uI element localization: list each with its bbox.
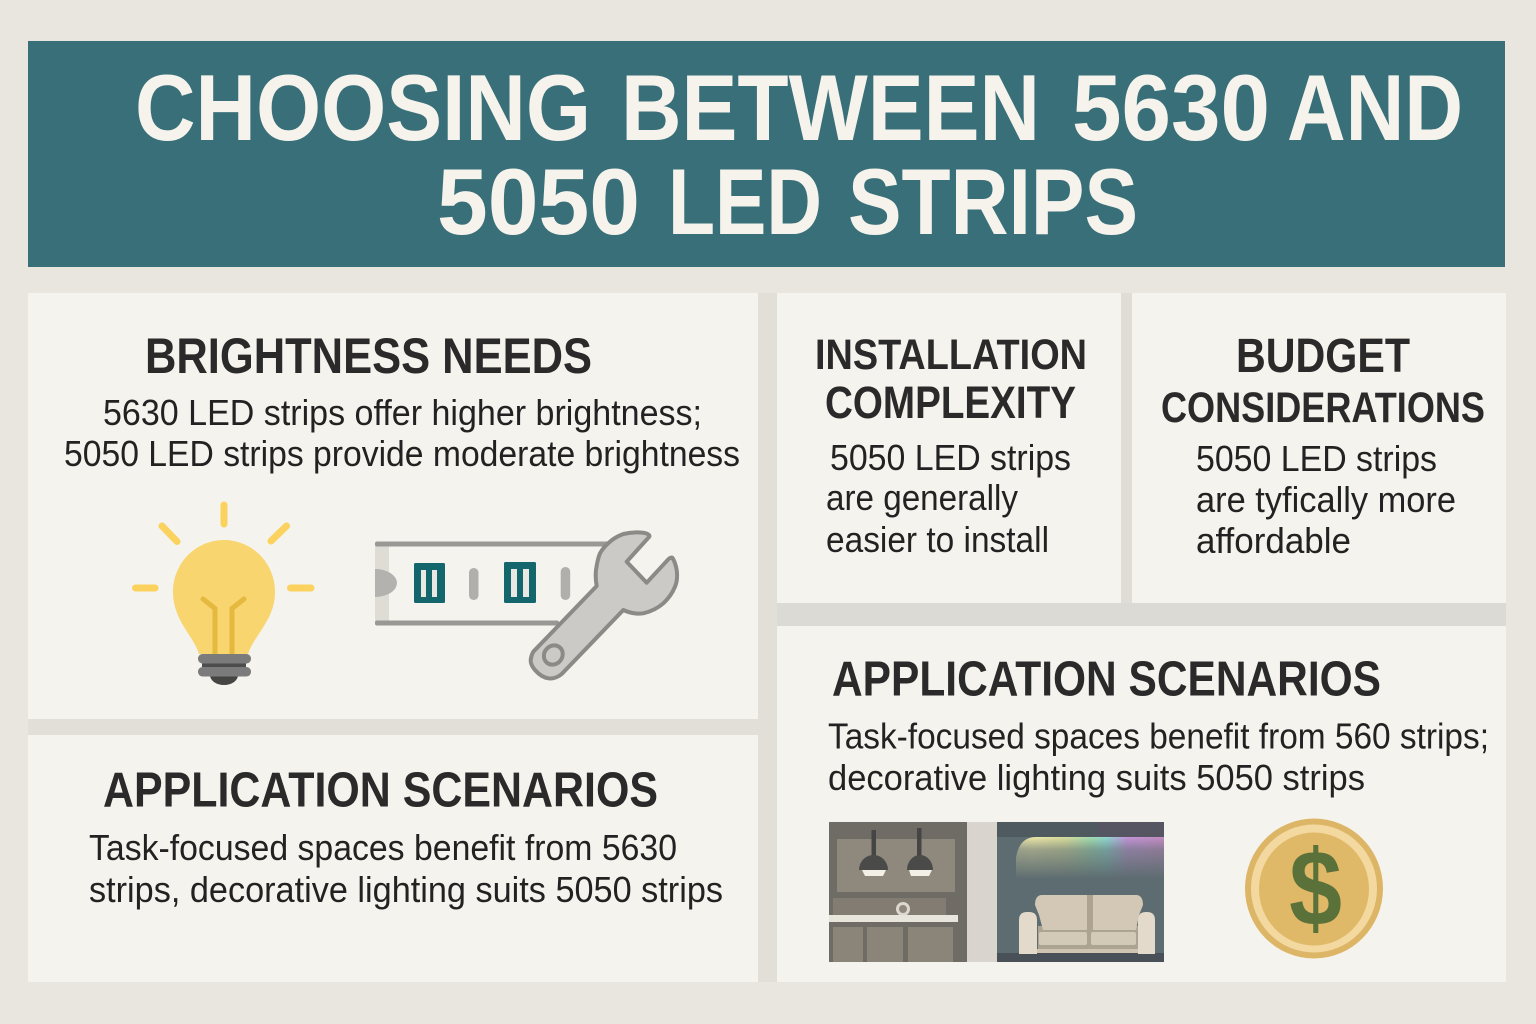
heading: application scenarios: APPLICATION SCENARIOS — [832, 653, 1381, 707]
illustration: kitchen task lighting — [829, 822, 967, 962]
text: application description: decorative lighting suits 5050 strips — [828, 757, 1365, 798]
text: application description: strips, decorative lighting suits 5050 strips — [89, 869, 723, 910]
illustration: living room decorative lighting — [997, 822, 1164, 962]
panel: brightness needs — [28, 293, 758, 719]
text: brightness description: 5050 LED strips provide moderate brightness — [64, 433, 740, 474]
text: installation description: are generally — [826, 477, 1019, 518]
text: application description — [89, 827, 723, 910]
icon: dollar coin — [1245, 818, 1383, 958]
heading: installation complexity: COMPLEXITY — [825, 377, 1076, 428]
heading: installation complexity — [815, 331, 1087, 428]
title text: STRIPS — [848, 149, 1138, 254]
panel: application scenarios left — [28, 735, 758, 982]
text: budget description: affordable — [1196, 520, 1351, 561]
text: application description — [828, 716, 1489, 798]
text: brightness description — [64, 392, 740, 474]
heading: application scenarios: APPLICATION SCENARIOS — [103, 764, 658, 818]
heading: installation complexity: INSTALLATION — [815, 331, 1087, 379]
text: budget description: are tyfically more — [1196, 479, 1456, 520]
text: application description: Task-focused spaces benefit from 560 strips; — [828, 716, 1489, 756]
icon: dollar coin: $ — [1289, 827, 1342, 948]
heading: budget considerations: BUDGET — [1236, 330, 1410, 383]
title text: LED — [668, 149, 822, 254]
text: installation description: 5050 LED strips — [830, 437, 1071, 478]
title text: 5050 — [437, 149, 640, 254]
heading: brightness needs: BRIGHTNESS NEEDS — [145, 328, 592, 384]
icon: wrench — [531, 532, 677, 678]
title text: AND — [1287, 55, 1463, 160]
title text: CHOOSING — [135, 55, 591, 160]
title text: 5630 — [1072, 55, 1270, 160]
title text — [135, 55, 1463, 254]
title text: BETWEEN — [621, 55, 1040, 160]
text: installation description: easier to install — [826, 519, 1049, 560]
panel: installation complexity — [777, 293, 1121, 603]
divider between illustrations — [967, 822, 997, 962]
text: brightness description: 5630 LED strips offer higher brightness; — [103, 392, 702, 433]
sofa — [1019, 895, 1155, 954]
text: budget description — [1196, 438, 1456, 561]
title banner — [28, 41, 1505, 267]
text: installation description — [826, 437, 1071, 560]
heading: budget considerations: CONSIDERATIONS — [1161, 384, 1485, 432]
icon: LED strip — [375, 542, 611, 626]
text: application description: Task-focused spaces benefit from 5630 — [89, 827, 677, 868]
icon: light bulb — [136, 505, 311, 685]
panel: budget considerations — [1132, 293, 1506, 603]
text: budget description: 5050 LED strips — [1196, 438, 1437, 479]
panel: application scenarios right — [777, 626, 1506, 982]
heading: budget considerations — [1161, 330, 1485, 432]
